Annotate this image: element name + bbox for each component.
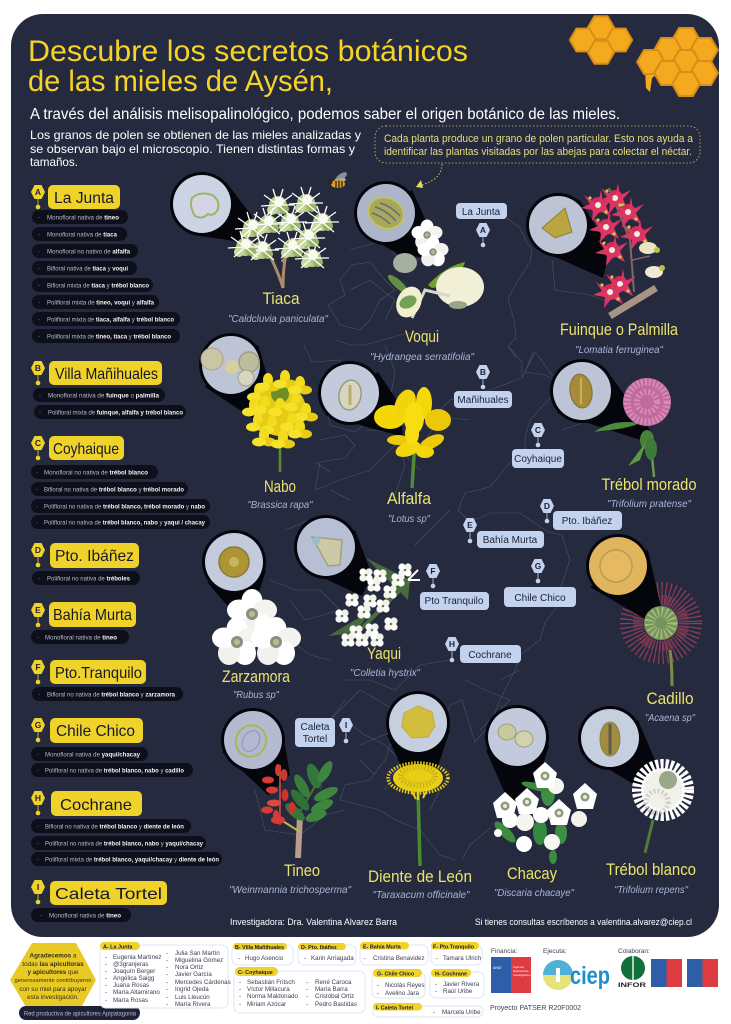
plant: Chacay bbox=[485, 705, 597, 899]
location A: La Junta: Polifloral mixta de tineo, tiaca y trébol blanco bbox=[47, 334, 171, 340]
acknowledgement hexagon: y apicultores que bbox=[27, 969, 79, 976]
location E: Bahía Murta: Bahía Murta bbox=[53, 607, 132, 624]
thanks: Coyhaique: María Barra bbox=[315, 986, 348, 993]
map tag: Mañihuales bbox=[454, 365, 512, 408]
callout: pollen note bbox=[375, 126, 700, 163]
thanks: Coyhaique: Pedro Bastidas bbox=[315, 1001, 357, 1008]
location C: Coyhaique: Polifloral no nativa de trébol blanco, nabo y yaqui / chacay bbox=[44, 520, 205, 526]
thanks: Coyhaique: Cristóbal Ortiz bbox=[315, 993, 354, 1000]
plant: Nabo bbox=[199, 333, 318, 511]
thanks: La Junta: @3granjeras bbox=[113, 961, 149, 968]
thanks: La Junta: Luis Lleucún bbox=[175, 994, 210, 1001]
map tag: Mañihuales: B bbox=[480, 367, 486, 377]
location A: La Junta: La Junta bbox=[54, 190, 114, 207]
thanks: Chile Chico: G- Chile Chico bbox=[377, 972, 415, 978]
location H: Cochrane: Cochrane bbox=[60, 797, 132, 814]
map tag: La Junta: La Junta bbox=[462, 207, 501, 218]
thanks: La Junta: - bbox=[166, 950, 168, 957]
thanks: Pto. Ibáñez: - bbox=[304, 955, 306, 962]
thanks: Coyhaique: C- Coyhaique bbox=[238, 970, 273, 976]
title bbox=[28, 35, 468, 98]
logo: ministry one bbox=[651, 959, 682, 987]
location B: Villa Mañihuales: Villa Mañihuales bbox=[55, 366, 158, 383]
location F: Pto. Tranquilo: · bbox=[38, 692, 40, 698]
location A: La Junta: · bbox=[38, 317, 40, 323]
map tag: Pto. Ibáñez: Pto. Ibáñez bbox=[562, 516, 612, 527]
map tag: La Junta: A bbox=[480, 225, 486, 235]
location G: Chile Chico bbox=[31, 718, 193, 777]
plant: Trébol blanco bbox=[578, 706, 696, 896]
location I: Caleta Tortel: Monofloral nativa de tineo bbox=[49, 912, 121, 920]
plant: Voqui: "Hydrangea serratifolia" bbox=[370, 351, 475, 363]
thanks: Bahía Murta: Cristina Benavidez bbox=[373, 955, 425, 962]
thanks: Coyhaique: Víctor Millacura bbox=[247, 986, 290, 993]
plant: Tiaca: "Caldcluvia paniculata" bbox=[228, 313, 329, 325]
plant: Alfalfa: "Lotus sp" bbox=[388, 513, 431, 525]
location C: Coyhaique: Bifloral no nativa de trébol blanco y trébol morado bbox=[44, 486, 184, 494]
thanks: Cochrane: H- Cochrane bbox=[435, 972, 467, 978]
plant: Zarzamora: Zarzamora bbox=[222, 667, 290, 686]
thanks: La Junta: - bbox=[166, 957, 168, 964]
location A: La Junta: · bbox=[38, 232, 40, 238]
location C: Coyhaique: C bbox=[35, 438, 41, 448]
thanks: Chile Chico: - bbox=[377, 982, 379, 989]
callout: pollen note: identificar las plantas visitadas por las abejas para colectar el néctar. bbox=[384, 146, 692, 158]
location I: Caleta Tortel: I bbox=[37, 882, 39, 892]
location D: Pto. Ibáñez: · bbox=[38, 576, 40, 582]
thanks: Caleta Tortel: I- Caleta Tortel bbox=[376, 1006, 414, 1012]
plant: Trébol morado: "Trifolium pratense" bbox=[607, 498, 692, 510]
plant: Fuinque o Palmilla: "Lomatia ferruginea" bbox=[575, 344, 664, 356]
location E: Bahía Murta: · bbox=[37, 635, 39, 641]
logo: ANID bbox=[491, 957, 531, 993]
plant: Alfalfa bbox=[318, 361, 451, 525]
acknowledgement hexagon bbox=[10, 943, 96, 1017]
plant: Fuinque o Palmilla: Fuinque o Palmilla bbox=[560, 320, 678, 339]
plant: Cadillo bbox=[586, 534, 696, 724]
location H: Cochrane: · bbox=[37, 857, 39, 863]
researcher credit: Investigadora: Dra. Valentina Alvarez Barra bbox=[230, 917, 398, 928]
location A: La Junta: A bbox=[35, 187, 41, 197]
thanks: Chile Chico: Avelino Jara bbox=[385, 990, 419, 997]
location G: Chile Chico: G bbox=[35, 720, 42, 730]
map of Aysén region bbox=[255, 218, 608, 860]
thanks: La Junta: Joaquín Berger bbox=[113, 968, 155, 975]
plant: Voqui: Voqui bbox=[405, 327, 439, 346]
acknowledgement hexagon: generosamente contribuyeron bbox=[14, 978, 92, 984]
plant: Tiaca bbox=[170, 172, 339, 325]
plant: Voqui bbox=[354, 181, 484, 363]
acknowledgement hexagon: Agradecemos a bbox=[30, 952, 77, 960]
location A: La Junta: Monofloral no nativo de alfalfa bbox=[47, 248, 130, 256]
thanks: Coyhaique: - bbox=[306, 1001, 308, 1008]
location H: Cochrane: · bbox=[37, 841, 39, 847]
thanks: Pto. Tranquilo bbox=[431, 942, 482, 965]
thanks: Chile Chico: - bbox=[377, 990, 379, 997]
logo: ministry two bbox=[687, 959, 718, 987]
location B: Villa Mañihuales bbox=[31, 361, 186, 419]
location H: Cochrane bbox=[31, 791, 222, 866]
subtitle: A través del análisis melisopalinológico, podemos saber el origen botánico de las mieles. bbox=[30, 106, 620, 123]
icon: honeycomb small bbox=[569, 15, 633, 65]
thanks: Cochrane: Javier Rivera bbox=[443, 981, 480, 988]
plant: Yaqui: Yaqui bbox=[367, 644, 401, 663]
location A: La Junta: Polifloral mixta de tineo, voqui y alfalfa bbox=[47, 300, 154, 306]
location I: Caleta Tortel bbox=[31, 880, 167, 922]
location B: Villa Mañihuales: Polifloral mixta de fuinque, alfalfa y trébol blanco bbox=[48, 410, 183, 416]
map tag: Coyhaique: Coyhaique bbox=[514, 454, 562, 465]
thanks: La Junta: - bbox=[166, 1001, 168, 1008]
location F: Pto. Tranquilo: Pto.Tranquilo bbox=[55, 665, 142, 682]
location H: Cochrane: Bifloral no nativa de trébol blanco y diente de león bbox=[45, 824, 184, 830]
thanks: La Junta: Juana Rosas bbox=[113, 982, 149, 989]
map tag: Cochrane: H bbox=[449, 639, 455, 649]
location A: La Junta bbox=[31, 185, 180, 343]
location B: Villa Mañihuales: B bbox=[35, 363, 41, 373]
label: Ejecuta: Ejecuta: bbox=[543, 948, 567, 955]
thanks: Coyhaique: Norma Maldonado bbox=[247, 993, 298, 1000]
map tag: Bahía Murta: E bbox=[467, 520, 473, 530]
location H: Cochrane: H bbox=[35, 793, 41, 803]
map tag: Pto. Ibáñez bbox=[540, 499, 622, 530]
map tag: Cochrane bbox=[445, 637, 521, 663]
thanks: La Junta: - bbox=[166, 964, 168, 971]
intro paragraph: tamaños. bbox=[30, 155, 78, 169]
plant: Chacay: Chacay bbox=[507, 864, 557, 883]
location A: La Junta: Monofloral nativa de tineo bbox=[47, 214, 119, 222]
thanks: Bahía Murta: E- Bahía Murta bbox=[363, 944, 402, 950]
thanks: Coyhaique: Sebastián Fritsch bbox=[247, 979, 295, 986]
location C: Coyhaique bbox=[31, 436, 210, 529]
thanks: Coyhaique: - bbox=[239, 1001, 241, 1008]
thanks: Coyhaique: - bbox=[239, 993, 241, 1000]
thanks: La Junta: María Rivera bbox=[175, 1001, 211, 1008]
thanks: Villa Mañihuales: Hugo Asencio bbox=[245, 955, 284, 962]
thanks: La Junta: - bbox=[166, 986, 168, 993]
location C: Coyhaique: Polifloral no nativa de trébol blanco, trébol morado y nabo bbox=[44, 504, 205, 510]
location E: Bahía Murta: E bbox=[35, 605, 41, 615]
thanks: La Junta: - bbox=[105, 982, 107, 989]
location H: Cochrane: Polifloral no nativa de trébol blanco, nabo y yaqui/chacay bbox=[45, 840, 203, 848]
map tag: La Junta bbox=[456, 203, 507, 247]
thanks: Coyhaique: - bbox=[239, 979, 241, 986]
plant: Nabo: "Brassica rapa" bbox=[248, 499, 314, 511]
thanks: Pto. Tranquilo: - bbox=[436, 955, 438, 962]
thanks: La Junta: Mercedes Cárdenas bbox=[175, 979, 231, 986]
plant: Yaqui: "Colletia hystrix" bbox=[350, 667, 421, 679]
logo: CIEP: ciep bbox=[570, 962, 610, 990]
acknowledgement hexagon: todas las apicultoras bbox=[22, 961, 84, 968]
plant: Diente de León: "Taraxacum officinale" bbox=[372, 889, 471, 901]
icon: bee bbox=[327, 171, 348, 188]
plant: Tineo: "Weinmannia trichosperma" bbox=[229, 884, 352, 896]
thanks: Caleta Tortel: - bbox=[433, 1009, 435, 1016]
map tag: Coyhaique: C bbox=[535, 425, 541, 435]
intro paragraph: se observan bajo el microscopio. Tienen distintas formas y bbox=[30, 142, 355, 156]
map tag: Chile Chico bbox=[504, 559, 576, 607]
location A: La Junta: · bbox=[38, 215, 40, 221]
thanks: La Junta: Eugenia Martínez bbox=[113, 954, 162, 961]
map tag: Chile Chico: G bbox=[535, 561, 542, 571]
thanks: La Junta: Javier García bbox=[175, 971, 212, 978]
map tag: Caleta Tortel bbox=[295, 718, 353, 747]
map tag: Pto Tranquilo: F bbox=[430, 566, 436, 576]
location F: Pto. Tranquilo bbox=[31, 660, 183, 701]
logo: ANID: ANID bbox=[493, 966, 502, 970]
thanks: La Junta: - bbox=[166, 971, 168, 978]
location B: Villa Mañihuales: Monofloral nativa de fuinque o palmilla bbox=[48, 392, 159, 400]
thanks: Pto. Ibáñez: Karin Arriagada bbox=[311, 955, 354, 962]
map tag: Mañihuales: Mañihuales bbox=[457, 395, 509, 406]
logo: INFOR: INFOR bbox=[618, 983, 647, 989]
location A: La Junta: · bbox=[38, 283, 40, 289]
location C: Coyhaique: · bbox=[36, 520, 38, 526]
location G: Chile Chico: Monofloral nativa de yaqui/chacay bbox=[45, 752, 140, 758]
thanks: Chile Chico bbox=[372, 969, 425, 998]
location B: Villa Mañihuales: · bbox=[39, 410, 41, 416]
thanks: La Junta: - bbox=[105, 968, 107, 975]
title: Descubre los secretos botánicos bbox=[28, 35, 468, 68]
panel: locations list bbox=[31, 185, 222, 922]
location F: Pto. Tranquilo: Bifloral no nativa de trébol blanco y zarzamora bbox=[47, 692, 175, 698]
plant: Cadillo: "Acaena sp" bbox=[645, 712, 696, 724]
callout: pollen note: Cada planta produce un grano de polen particular. Esto nos ayuda a bbox=[384, 133, 694, 145]
map tag: Pto. Ibáñez: D bbox=[544, 501, 550, 511]
plant: Chacay: "Discaria chacaye" bbox=[494, 887, 575, 899]
location C: Coyhaique: Coyhaique bbox=[53, 441, 119, 458]
plant: Trébol blanco: "Trifolium repens" bbox=[614, 884, 689, 896]
arrow: callout to plant bbox=[416, 164, 442, 188]
thanks: Villa Mañihuales: B- Villa Mañihuales bbox=[235, 945, 284, 951]
thanks: Pto. Tranquilo: Tamara Ulrich bbox=[443, 955, 482, 962]
location A: La Junta: Bifloral mixta de tiaca y trébol blanco bbox=[47, 282, 149, 290]
location E: Bahía Murta: Monofloral nativa de tineo bbox=[45, 634, 117, 642]
thanks: Cochrane: - bbox=[435, 981, 437, 988]
intro paragraph: Los granos de polen se obtienen de las mieles analizadas y bbox=[30, 128, 361, 142]
location A: La Junta: · bbox=[38, 334, 40, 340]
logo: INFOR bbox=[618, 956, 647, 989]
thanks: Caleta Tortel bbox=[373, 1003, 483, 1017]
thanks: La Junta: - bbox=[105, 961, 107, 968]
plant: Trébol blanco: Trébol blanco bbox=[606, 860, 696, 879]
thanks: La Junta: A- La Junta bbox=[103, 944, 133, 950]
thanks: Pto. Ibáñez bbox=[298, 943, 356, 965]
location G: Chile Chico: Chile Chico bbox=[56, 723, 135, 740]
location A: La Junta: Polifloral mixta de tiaca, alfalfa y trébol blanco bbox=[47, 316, 174, 324]
thanks: Coyhaique: - bbox=[306, 993, 308, 1000]
location B: Villa Mañihuales: · bbox=[39, 393, 41, 399]
plant: Nabo: Nabo bbox=[264, 477, 296, 496]
plant: Tiaca: Tiaca bbox=[262, 289, 300, 308]
map tag: Bahía Murta bbox=[463, 518, 544, 548]
thanks: La Junta: - bbox=[105, 997, 107, 1004]
location C: Coyhaique: · bbox=[36, 470, 38, 476]
location A: La Junta: Monofloral nativa de tiaca bbox=[47, 232, 117, 238]
location G: Chile Chico: · bbox=[37, 768, 39, 774]
badge: red productiva: Red productiva de apicultores Apipatagonia bbox=[24, 1010, 136, 1018]
thanks: Chile Chico: Nicolás Reyes bbox=[385, 982, 425, 989]
thanks: Villa Mañihuales bbox=[232, 943, 293, 965]
thanks: Coyhaique: - bbox=[306, 979, 308, 986]
project code: Proyecto PATSER R20F0002 bbox=[490, 1003, 581, 1012]
thanks: La Junta: - bbox=[105, 975, 107, 982]
location C: Coyhaique: · bbox=[36, 504, 38, 510]
map tag: Pto Tranquilo bbox=[420, 564, 489, 610]
map tag: Bahía Murta: Bahía Murta bbox=[483, 535, 538, 546]
thanks: Cochrane: - bbox=[435, 988, 437, 995]
icon: honeycomb large bbox=[636, 27, 719, 97]
location A: La Junta: Bifloral nativa de tiaca y voqui bbox=[47, 266, 128, 272]
logo: ANID: Agencia bbox=[513, 965, 524, 969]
thanks: La Junta: Angélica Saigg bbox=[113, 975, 155, 982]
location A: La Junta: · bbox=[38, 249, 40, 255]
label: Financia: Financia: bbox=[491, 948, 518, 955]
badge: red productiva bbox=[19, 1006, 140, 1020]
location G: Chile Chico: Polifloral no nativa de trébol blanco, nabo y cadillo bbox=[45, 768, 184, 774]
acknowledgement hexagon: con su miel para apoyar bbox=[19, 986, 87, 993]
plant: Tineo: Tineo bbox=[284, 861, 320, 880]
location G: Chile Chico: · bbox=[37, 752, 39, 758]
location C: Coyhaique: · bbox=[36, 487, 38, 493]
label: Colaboran: Colaboran: bbox=[618, 948, 650, 955]
thanks: Pto. Tranquilo: F- Pto.Tranquilo bbox=[433, 944, 475, 950]
plant: Trébol morado bbox=[550, 359, 696, 510]
map tag: Cochrane: Cochrane bbox=[468, 650, 512, 661]
thanks: Bahía Murta: - bbox=[364, 955, 366, 962]
thanks: Bahía Murta bbox=[360, 942, 428, 965]
thanks: La Junta: María Rosas bbox=[113, 997, 148, 1004]
location I: Caleta Tortel: · bbox=[40, 913, 42, 919]
thanks: Coyhaique: Miriam Azócar bbox=[247, 1001, 286, 1008]
location D: Pto. Ibáñez: Polifloral no nativa de tréboles bbox=[47, 576, 130, 582]
map tag: Pto Tranquilo: Pto Tranquilo bbox=[425, 596, 484, 607]
thanks: Cochrane: Raúl Uribe bbox=[443, 988, 473, 995]
plant: Diente de León bbox=[368, 691, 472, 901]
thanks: La Junta: Miguelina Gómez bbox=[175, 957, 223, 964]
location E: Bahía Murta bbox=[31, 602, 136, 644]
map tag: Caleta Tortel: Caleta bbox=[301, 722, 330, 733]
plant: Zarzamora bbox=[202, 530, 301, 701]
thanks: Caleta Tortel: Marcela Uribe bbox=[442, 1009, 481, 1016]
location I: Caleta Tortel: Caleta Tortel bbox=[55, 886, 162, 903]
location D: Pto. Ibáñez: D bbox=[35, 545, 41, 555]
plant: Fuinque o Palmilla bbox=[526, 183, 678, 356]
thanks: La Junta bbox=[100, 942, 231, 1008]
thanks: Pto. Ibáñez: D- Pto. Ibáñez bbox=[301, 945, 337, 951]
plant: Cadillo: Cadillo bbox=[646, 689, 694, 708]
map tag: Coyhaique bbox=[512, 423, 564, 468]
plant: Tineo bbox=[221, 708, 352, 896]
logo: ANID: Investigación bbox=[513, 973, 531, 977]
location D: Pto. Ibáñez: Pto. Ibáñez bbox=[55, 548, 134, 565]
map tag: Chile Chico: Chile Chico bbox=[514, 593, 566, 604]
plant: Trébol morado: Trébol morado bbox=[602, 475, 696, 494]
contact: Si tienes consultas escríbenos a valentina.alvarez@ciep.cl bbox=[475, 917, 692, 928]
intro paragraph bbox=[30, 128, 361, 169]
map tag: Caleta Tortel: I bbox=[345, 720, 347, 730]
thanks: La Junta: - bbox=[166, 979, 168, 986]
logo: ANID: Nacional de bbox=[513, 969, 529, 973]
thanks: Coyhaique bbox=[234, 967, 365, 1013]
location H: Cochrane: · bbox=[37, 824, 39, 830]
title: de las mieles de Aysén, bbox=[28, 65, 333, 98]
thanks: Cochrane bbox=[430, 969, 484, 998]
thanks: La Junta: Ingrid Ojeda bbox=[175, 986, 209, 993]
thanks: La Junta: - bbox=[166, 994, 168, 1001]
thanks: La Junta: María Altamirano bbox=[113, 989, 160, 996]
plant: Yaqui bbox=[294, 515, 421, 679]
map tag: Caleta Tortel: Tortel bbox=[303, 734, 327, 745]
thanks: La Junta: Nora Ortiz bbox=[175, 964, 203, 971]
location A: La Junta: · bbox=[38, 300, 40, 306]
logo: CIEP bbox=[543, 960, 610, 990]
location A: La Junta: · bbox=[38, 266, 40, 272]
acknowledgement hexagon: esta investigación. bbox=[27, 994, 79, 1001]
location D: Pto. Ibáñez bbox=[31, 543, 140, 585]
thanks: Coyhaique: René Caroca bbox=[315, 979, 352, 986]
location C: Coyhaique: Monofloral no nativa de trébol blanco bbox=[44, 470, 148, 476]
plant: Alfalfa: Alfalfa bbox=[387, 489, 432, 508]
location H: Cochrane: Polifloral mixta de trébol blanco, yaqui/chacay y diente de león bbox=[45, 856, 219, 864]
thanks: Villa Mañihuales: - bbox=[238, 955, 240, 962]
location F: Pto. Tranquilo: F bbox=[35, 662, 41, 672]
plant: Diente de León: Diente de León bbox=[368, 867, 472, 886]
plant: Zarzamora: "Rubus sp" bbox=[233, 689, 280, 701]
thanks: Coyhaique: - bbox=[306, 986, 308, 993]
thanks: La Junta: - bbox=[105, 954, 107, 961]
thanks: Coyhaique: - bbox=[239, 986, 241, 993]
thanks: La Junta: - bbox=[105, 989, 107, 996]
thanks: La Junta: Julia San Martín bbox=[175, 950, 220, 957]
